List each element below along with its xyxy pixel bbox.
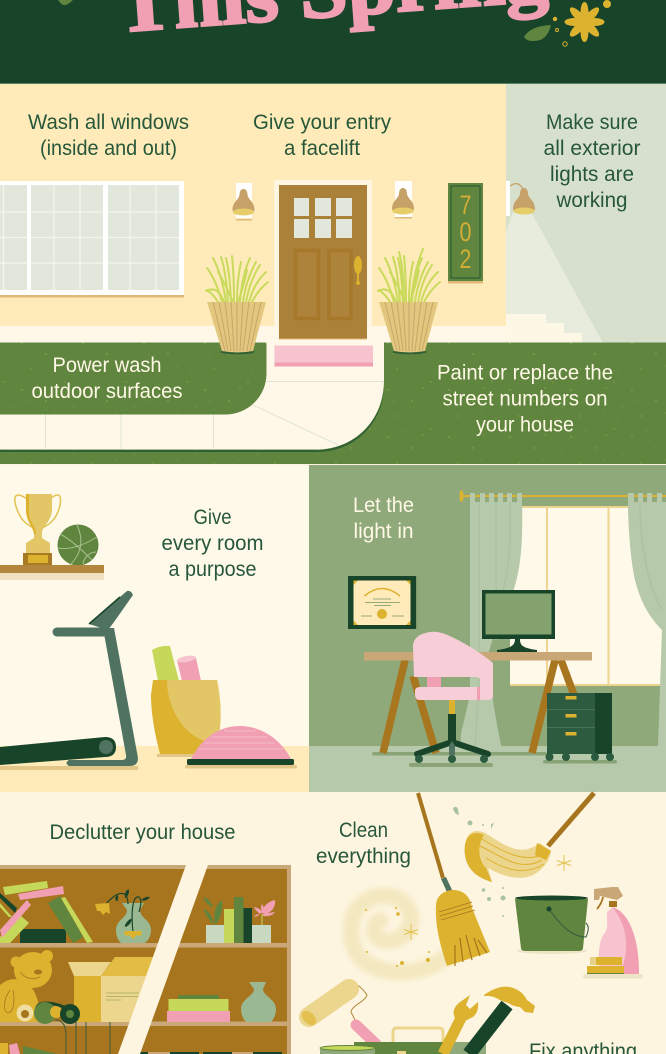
ground <box>0 326 506 464</box>
text: give every room a purpose: Give <box>194 506 232 529</box>
lawn left <box>0 342 266 414</box>
text: power wash <box>32 354 182 403</box>
panel: home office <box>309 465 666 792</box>
desk <box>364 652 592 756</box>
icon: treadmill <box>0 591 138 770</box>
right sky panel <box>506 84 666 343</box>
icon: toolbox <box>354 1028 486 1054</box>
curb shadow <box>0 385 384 452</box>
bookshelf <box>0 865 291 1054</box>
headphones <box>34 1002 110 1054</box>
teddy bear <box>0 950 53 1022</box>
text: wash windows: (inside and out) <box>40 137 177 160</box>
planter: right <box>378 249 440 354</box>
tidy flower pot <box>252 900 275 943</box>
icon: basketball <box>58 524 98 566</box>
icon: yellow flower and leaf <box>524 0 611 46</box>
stacked books <box>167 995 230 1022</box>
text: power wash: Power wash <box>52 354 162 377</box>
text: clean everything <box>316 819 411 868</box>
text: street numbers <box>437 362 613 436</box>
text: wash windows <box>28 111 189 160</box>
lower shelf contents <box>0 1043 282 1054</box>
tidy upright books <box>224 897 252 943</box>
window with light <box>510 506 666 686</box>
curtain rod <box>460 490 666 502</box>
text: street numbers: street numbers on <box>442 388 608 410</box>
text: entry facelift: a facelift <box>284 137 360 160</box>
wilted flower vase <box>95 889 151 943</box>
sparkle <box>557 855 571 871</box>
text: let the light in: light in <box>354 520 414 543</box>
text: exterior lights: Make sure <box>546 111 638 134</box>
icon: exterior lamp <box>506 181 535 216</box>
water droplets <box>453 807 506 917</box>
text: exterior lights <box>544 111 641 212</box>
panel: home gym room <box>0 465 309 792</box>
text: clean everything: everything <box>316 845 411 868</box>
paving lines <box>46 382 384 449</box>
icon: trophy <box>15 494 61 565</box>
planter: left <box>206 256 268 354</box>
header banner <box>0 0 666 84</box>
text: give every room a purpose: a purpose <box>168 558 256 581</box>
icon: wrench <box>443 995 478 1054</box>
text: clean everything: Clean <box>339 819 388 842</box>
cabinet <box>543 693 617 764</box>
icon: wall lamp right <box>392 181 414 218</box>
text: entry facelift: Give your entry <box>253 111 391 134</box>
icon: broom <box>418 793 490 966</box>
icon: paint roller <box>299 983 376 1044</box>
text: let the light in <box>353 494 414 543</box>
text: wash windows: Wash all windows <box>28 111 189 134</box>
icon: door handle <box>354 256 362 285</box>
dust swirl <box>351 896 445 972</box>
curtain right <box>628 493 666 746</box>
certificate frame <box>348 576 418 629</box>
icon: mop <box>465 793 594 882</box>
text: give every room a purpose: every room <box>162 532 264 555</box>
text: declutter your house: Declutter your house <box>50 821 236 844</box>
text: exterior lights: lights are <box>550 163 634 186</box>
icon: basket with rolls <box>151 646 221 757</box>
text: street numbers: your house <box>476 414 574 436</box>
vase <box>241 982 276 1022</box>
office chair <box>409 632 493 767</box>
shelf <box>0 565 104 580</box>
icon: balance dome <box>185 726 297 768</box>
light cone <box>506 212 603 343</box>
door <box>274 180 372 340</box>
icon: hammer <box>469 987 535 1054</box>
text: let the light in: Let the <box>353 494 414 517</box>
text: exterior lights: all exterior <box>544 137 641 160</box>
cardboard box <box>68 957 153 1022</box>
curtain left <box>461 493 522 754</box>
monitor <box>482 590 555 652</box>
steps <box>506 314 582 343</box>
messy books <box>0 881 93 943</box>
house number plaque <box>448 183 483 284</box>
lawn right <box>0 342 666 464</box>
pink door mat <box>274 346 373 366</box>
panel: house exterior <box>0 84 666 464</box>
diagonal divider <box>118 865 208 1054</box>
wall <box>0 84 506 326</box>
house number plaque: 0 <box>460 217 472 247</box>
panel: declutter and clean <box>0 792 666 1054</box>
text: exterior lights: working <box>556 189 628 212</box>
text: street numbers: Paint or replace the <box>437 362 613 384</box>
house number plaque: 2 <box>460 244 472 274</box>
icon: wall lamp left <box>232 183 254 220</box>
icon: small leaf left <box>58 0 73 5</box>
icon: paint can <box>320 1046 375 1054</box>
house number plaque: 7 <box>460 190 472 220</box>
text: entry facelift <box>253 111 391 160</box>
icon: spray bottle <box>583 887 643 978</box>
text: give every room a purpose <box>162 506 264 581</box>
icon: bucket <box>515 896 588 954</box>
window <box>0 181 184 298</box>
tidy plant pot <box>203 897 224 943</box>
text: power wash: outdoor surfaces <box>32 380 182 403</box>
